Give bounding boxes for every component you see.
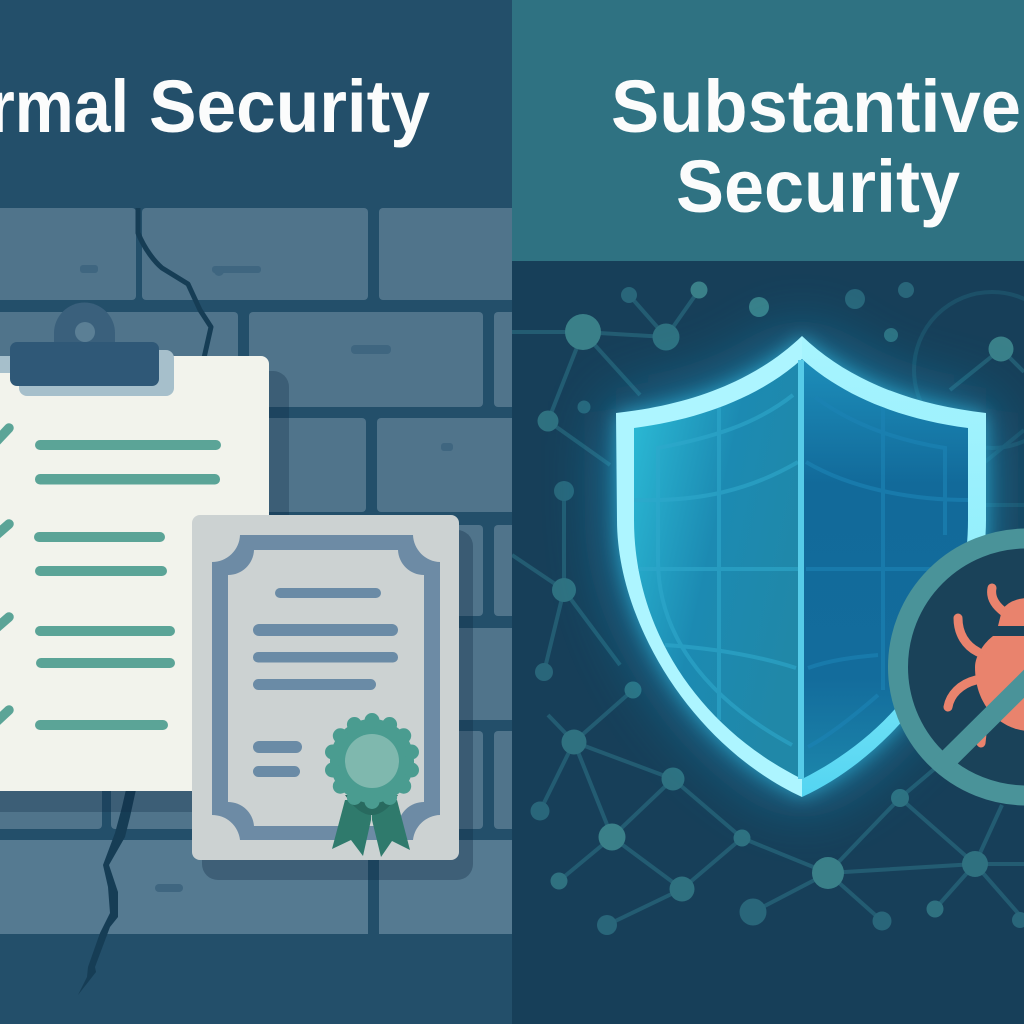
clipboard shadow (0, 371, 289, 812)
shield grid right (806, 397, 968, 747)
heading: substantive security: Substantive (611, 65, 1021, 148)
bug icon (948, 588, 1024, 743)
panel: formal security (0, 78, 512, 994)
shield grid left (634, 395, 798, 745)
certificate text lines (253, 588, 398, 777)
certificate shadow (202, 530, 473, 880)
prohibition slash (942, 670, 1024, 764)
certificate (192, 515, 459, 860)
clipboard (0, 303, 269, 791)
check marks (0, 428, 9, 724)
heading: formal security: Security (149, 65, 430, 148)
wall cracks (78, 208, 211, 995)
network background (512, 282, 1024, 935)
seal ribbons (332, 800, 410, 857)
shield (610, 330, 992, 800)
checklist lines (34, 440, 221, 730)
shield centre line (798, 360, 804, 779)
certificate border (212, 535, 440, 840)
panel: substantive security (512, 0, 1024, 1024)
heading: substantive security (611, 65, 1021, 228)
brick wall (0, 208, 534, 934)
shield outline (610, 330, 992, 800)
heading: formal security (0, 78, 430, 148)
shield glow (616, 336, 986, 797)
seal (325, 713, 419, 809)
shield face (630, 355, 972, 785)
no-bug badge (898, 538, 1024, 796)
heading: substantive security: Security (676, 145, 960, 228)
clipboard clip (0, 303, 174, 396)
network nodes (530, 282, 1024, 935)
